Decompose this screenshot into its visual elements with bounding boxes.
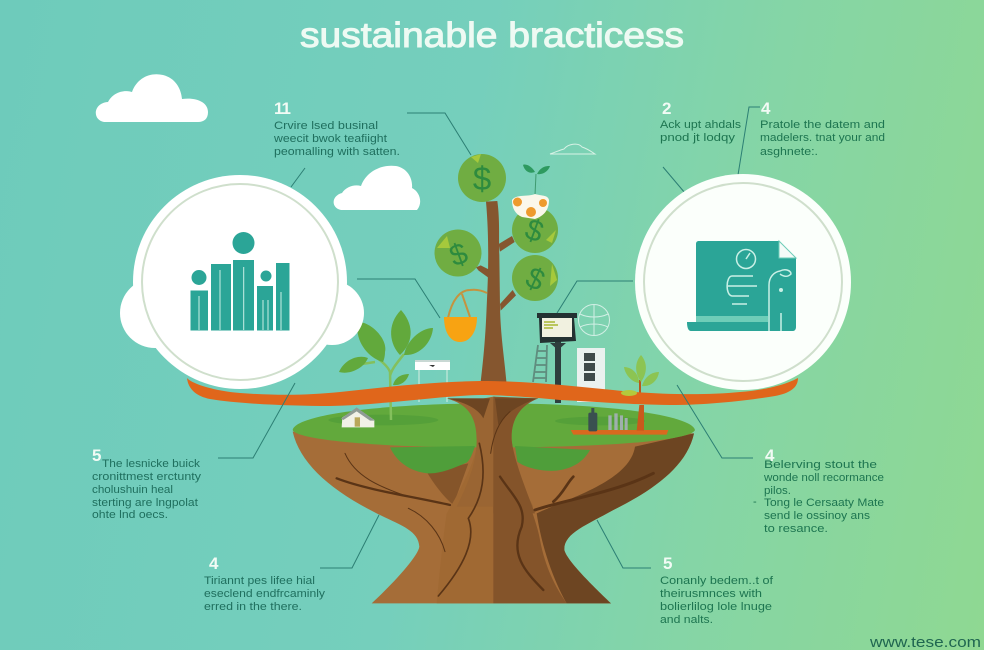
panel: left circle badge — [120, 175, 364, 389]
callout: top right 4: asghnete:. — [760, 146, 818, 158]
ladder — [533, 345, 547, 382]
callout: mid left 5: 5 — [92, 446, 101, 465]
icon: small white table — [415, 360, 450, 402]
icon: orange basket — [444, 290, 487, 342]
callout: mid left 5: The lesnicke buick — [102, 458, 201, 470]
small leaf on ribbon — [621, 390, 637, 396]
callout: mid right 4: wonde noll recormance — [763, 472, 884, 484]
callout: bottom left 4: erred in the there. — [204, 601, 302, 613]
callout: top right 2: Ack upt ahdals — [660, 119, 742, 131]
callout: mid right 4: Belerving stout the — [764, 459, 877, 471]
callout: top left 11: Crvire lsed businal — [274, 120, 378, 132]
cloud outline: small — [550, 144, 595, 154]
grass dark patches — [328, 415, 438, 425]
callout: top right 2: pnod jt lodqy — [660, 132, 736, 144]
callout: bottom right 5: 5 — [663, 554, 672, 573]
plant right — [624, 355, 659, 400]
callout: top right 2 — [660, 99, 742, 144]
callout: top left 11: 11 — [274, 99, 291, 118]
orange ribbon — [187, 378, 798, 406]
callout: mid right 4: pilos. — [764, 485, 791, 497]
icon: globe outline — [578, 304, 610, 336]
callout: mid left 5 — [92, 446, 202, 521]
coin lower right: $ — [520, 261, 550, 298]
callout: top right 4 — [760, 99, 885, 158]
callout: top left 11: weecit bwok teafiight — [273, 133, 387, 145]
callout: top right 2: 2 — [662, 99, 671, 118]
leaf right — [404, 328, 433, 355]
island wedge shade — [427, 463, 468, 505]
callout: bottom left 4 — [204, 554, 326, 613]
coin top — [458, 154, 506, 202]
panel: right circle badge — [635, 174, 851, 390]
tree and island — [293, 154, 695, 603]
board — [537, 313, 577, 343]
coin top: $ — [473, 160, 491, 197]
callout: top right 4: madelers. tnat your and — [760, 132, 885, 144]
cloud: top left — [96, 74, 208, 122]
callout: mid right 4: Tong le Cersaaty Mate — [764, 497, 884, 509]
callout: mid right 4 — [753, 446, 884, 535]
island soil — [293, 432, 694, 603]
callout: mid left 5: cholushuin heal — [92, 484, 173, 496]
cloud: centre — [334, 166, 420, 210]
leaf lower left — [339, 357, 368, 373]
post — [555, 340, 561, 403]
floating island — [293, 397, 695, 603]
callout: bottom right 5: theirusmnces with — [660, 588, 762, 600]
island soil shade — [537, 433, 694, 603]
icon: billboard with ladder — [533, 313, 577, 403]
coin upper right — [512, 207, 558, 253]
callout: bottom right 5: Conanly bedem..t of — [660, 575, 774, 587]
callout: top right 4: 4 — [761, 99, 771, 118]
callout: mid left 5: cronittmest erctunty — [92, 471, 202, 483]
stem — [362, 354, 404, 420]
icon: server cabinet — [577, 348, 605, 402]
white blossom with sprout — [512, 165, 550, 219]
icon: people bar chart — [190, 232, 290, 330]
callout: top left 11: peomalling with satten. — [274, 146, 400, 158]
callout: mid left 5: sterting are lngpolat — [92, 497, 198, 509]
leaf left large — [357, 322, 385, 362]
callout: bottom right 5 — [660, 554, 774, 626]
callout: bottom right 5: bolierlilog lole lnuge — [660, 601, 772, 613]
grass hang left — [390, 446, 475, 473]
callout: mid right 4: to resance. — [764, 523, 828, 535]
coin upper right: $ — [521, 213, 548, 250]
tree trunk with branches — [476, 201, 516, 393]
callout: mid left 5: ohte lnd oecs. — [92, 509, 168, 521]
callout: mid right 4: 4 — [765, 446, 775, 465]
coin left: $ — [445, 237, 473, 273]
trunk over grass — [447, 398, 538, 507]
trunk base right — [493, 397, 567, 603]
callout: bottom left 4: eseclend endfrcaminly — [204, 588, 326, 600]
icon: house — [341, 407, 375, 427]
trunk base left — [437, 397, 493, 603]
icon: document laptop — [687, 241, 796, 331]
leader lines — [218, 107, 760, 568]
roots and cracks — [337, 412, 653, 596]
leaf lower right — [393, 374, 409, 385]
callout: mid right 4: - — [753, 496, 757, 508]
leaf top — [391, 310, 411, 355]
callout: top right 4: Pratole the datem and — [760, 119, 885, 131]
title: sustainable bracticess — [300, 16, 684, 55]
grass top — [293, 403, 695, 447]
callout: top left 11 — [273, 99, 400, 158]
callout: bottom left 4: Tiriannt pes lifee hial — [204, 575, 315, 587]
callout: bottom right 5: and nalts. — [660, 614, 713, 626]
coin lower right — [512, 255, 558, 301]
coin leaves — [434, 154, 558, 301]
plant left — [339, 310, 433, 420]
icon: right ground objects — [571, 405, 668, 435]
callout: bottom left 4: 4 — [209, 554, 219, 573]
coin left — [434, 230, 482, 276]
grass hang right — [515, 446, 590, 471]
callout: mid right 4: send le ossinoy ans — [764, 510, 871, 522]
